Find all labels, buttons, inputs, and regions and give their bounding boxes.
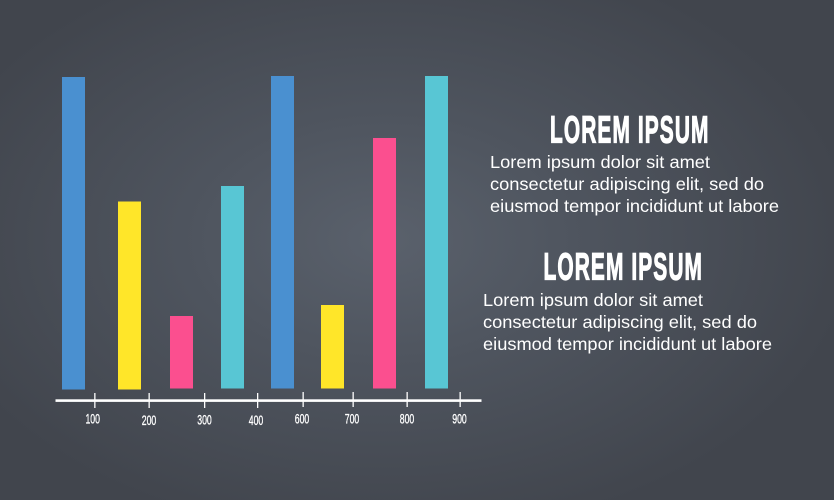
heading 1: LOREM IPSUM <box>550 109 710 151</box>
bar 4 teal <box>221 186 244 388</box>
bar 5 blue <box>271 76 294 388</box>
heading 2: LOREM IPSUM <box>544 246 703 288</box>
bar 3 pink <box>170 316 193 388</box>
body text 2: Lorem ipsum dolor sit amet <box>483 290 703 310</box>
body text 1: Lorem ipsum dolor sit amet <box>490 152 710 172</box>
axis labels: 300 <box>197 412 212 428</box>
body text 2 <box>483 290 772 354</box>
axis labels <box>85 412 467 428</box>
text block 2 <box>483 246 772 354</box>
axis labels: 400 <box>249 413 263 428</box>
text block 1 <box>490 109 779 216</box>
bar 1 blue <box>62 77 85 390</box>
x axis <box>56 392 482 408</box>
body text 2: eiusmod tempor incididunt ut labore <box>483 334 772 354</box>
axis labels: 200 <box>142 413 156 428</box>
bar chart <box>56 76 482 428</box>
axis labels: 100 <box>85 412 100 426</box>
body text 1 <box>490 152 779 216</box>
bar 2 yellow <box>118 202 141 390</box>
body text 1: consectetur adipiscing elit, sed do <box>490 174 764 194</box>
bar 6 yellow <box>321 305 344 388</box>
axis labels: 900 <box>452 412 467 426</box>
body text 1: eiusmod tempor incididunt ut labore <box>490 196 779 216</box>
axis labels: 800 <box>400 412 414 426</box>
bar 7 pink <box>373 138 396 388</box>
axis labels: 600 <box>295 412 309 426</box>
bar 8 teal <box>425 76 448 388</box>
axis labels: 700 <box>345 412 359 426</box>
body text 2: consectetur adipiscing elit, sed do <box>483 312 757 332</box>
